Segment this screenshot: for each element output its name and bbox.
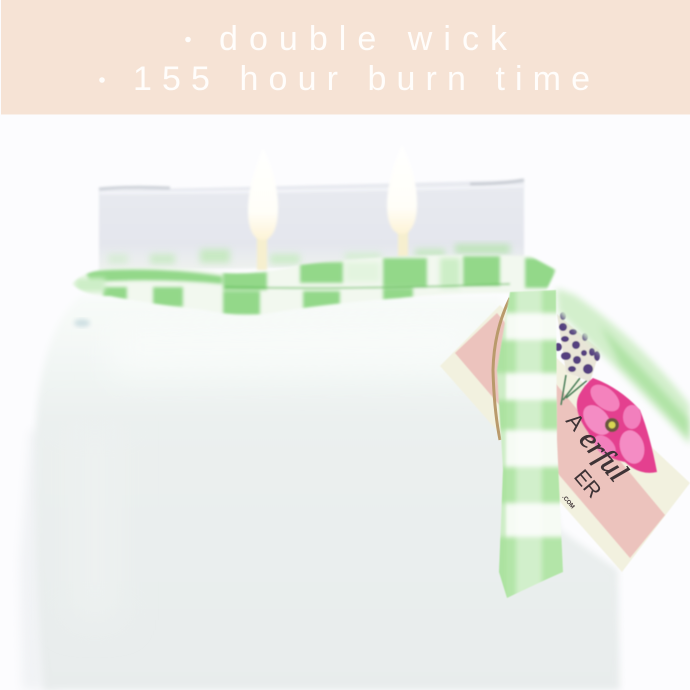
tag brand text (560, 408, 634, 510)
body soft shading (70, 315, 480, 620)
tag lavender sprig (554, 312, 600, 405)
jar pale outer edge (20, 430, 60, 690)
jar body (35, 296, 620, 690)
tag pink flower (577, 378, 657, 473)
tag brand text: erful (573, 423, 634, 488)
right flame and wick (387, 145, 417, 257)
top banner (1, 0, 690, 114)
banner text: burn time: 155 hour burn time (133, 60, 590, 98)
tag brand text: .COM (560, 494, 575, 510)
hanging ribbon (496, 290, 564, 598)
ribbon around jar (72, 254, 557, 316)
right ribbon tail (556, 288, 690, 445)
left flame and wick (248, 148, 278, 270)
tag cord (493, 298, 510, 440)
tag brand text: A (561, 408, 590, 436)
jar glass rim and upper section (99, 180, 525, 272)
wax seen through glass with green reflection (108, 244, 510, 264)
tag card (440, 305, 690, 572)
blue accent on shoulder (74, 319, 90, 327)
tag pink band (455, 313, 665, 558)
price tag (440, 298, 690, 572)
tag brand text: ER (569, 465, 606, 503)
banner text: double wick: double wick (219, 20, 508, 58)
candle jar (20, 180, 620, 690)
